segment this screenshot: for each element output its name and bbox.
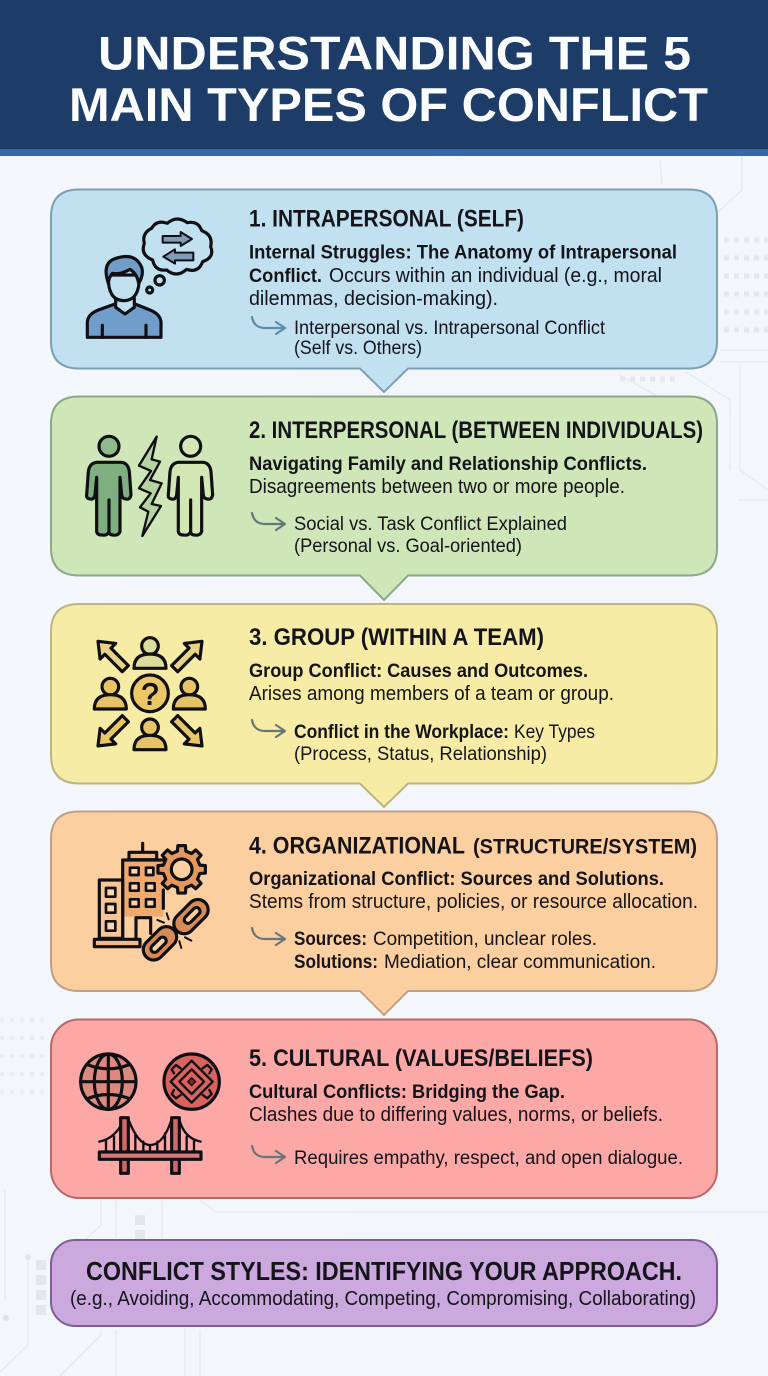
related topic: Key Types xyxy=(514,722,595,743)
arrow xyxy=(252,317,285,334)
description: Navigating Family and Relationship Conflicts. xyxy=(249,453,647,475)
related topic: Social vs. Task Conflict Explained xyxy=(294,514,567,535)
related topic xyxy=(294,514,567,557)
description: Conflict. xyxy=(249,265,322,287)
related topic xyxy=(294,722,595,765)
related topic xyxy=(294,318,606,359)
icon: building, gear and broken chain xyxy=(94,843,212,964)
heading: 2. INTERPERSONAL (BETWEEN INDIVIDUALS) xyxy=(249,417,703,444)
related topic xyxy=(294,929,656,973)
description xyxy=(249,453,647,498)
styles list: (e.g., Avoiding, Accommodating, Competing, Compromising, Collaborating) xyxy=(70,1288,696,1310)
description: Stems from structure, policies, or resource allocation. xyxy=(249,891,698,913)
heading: 4. ORGANIZATIONAL xyxy=(249,832,465,860)
arrow xyxy=(252,1146,285,1163)
related topic: Competition, unclear roles. xyxy=(373,929,597,950)
related topic: Mediation, clear communication. xyxy=(384,952,656,973)
description xyxy=(249,1081,663,1126)
panel: 2 interpersonal xyxy=(51,396,717,600)
heading xyxy=(249,832,697,860)
description: Occurs within an individual (e.g., moral xyxy=(329,265,662,287)
heading: 1. INTRAPERSONAL (SELF) xyxy=(249,206,524,232)
description: Clashes due to differing values, norms, or beliefs. xyxy=(249,1104,663,1126)
icon: group with question mark: ? xyxy=(141,677,159,711)
description xyxy=(249,242,677,310)
title: UNDERSTANDING THE 5 xyxy=(98,26,691,80)
icon: person thinking xyxy=(87,219,212,337)
related topic: Conflict in the Workplace: xyxy=(294,722,509,743)
related topic: (Self vs. Others) xyxy=(294,338,422,359)
arrow xyxy=(252,513,285,530)
panel: 5 cultural xyxy=(51,1020,717,1198)
icon: globe, cultural emblem and bridge xyxy=(81,1054,219,1173)
panel: 1 intrapersonal xyxy=(51,190,717,392)
icon: two people with lightning xyxy=(87,436,213,536)
description xyxy=(249,868,698,913)
title xyxy=(69,26,708,131)
related topic: Requires empathy, respect, and open dialogue. xyxy=(294,1148,683,1169)
description: Internal Struggles: The Anatomy of Intrapersonal xyxy=(249,242,677,264)
description: Organizational Conflict: Sources and Solutions. xyxy=(249,868,664,890)
related topic: Sources: xyxy=(294,929,367,950)
panel: conflict styles xyxy=(51,1240,717,1326)
description: dilemmas, decision-making). xyxy=(249,288,498,310)
panel: 4 organizational xyxy=(51,812,717,1015)
description xyxy=(249,660,614,705)
related topic: Solutions: xyxy=(294,952,378,973)
description: Disagreements between two or more people. xyxy=(249,476,625,498)
related topic: (Personal vs. Goal-oriented) xyxy=(294,536,522,557)
header banner xyxy=(0,0,768,156)
description: Cultural Conflicts: Bridging the Gap. xyxy=(249,1081,565,1103)
title: MAIN TYPES OF CONFLICT xyxy=(69,78,708,131)
arrow xyxy=(252,720,285,737)
heading: 3. GROUP (WITHIN A TEAM) xyxy=(249,624,544,651)
heading: 5. CULTURAL (VALUES/BELIEFS) xyxy=(249,1045,593,1072)
heading: (STRUCTURE/SYSTEM) xyxy=(473,836,697,858)
panel: 3 group xyxy=(51,604,717,807)
description: Group Conflict: Causes and Outcomes. xyxy=(249,660,588,682)
heading: CONFLICT STYLES: IDENTIFYING YOUR APPROACH. xyxy=(86,1256,682,1286)
related topic: (Process, Status, Relationship) xyxy=(294,744,547,765)
description: Arises among members of a team or group. xyxy=(249,683,614,705)
related topic: Interpersonal vs. Intrapersonal Conflict xyxy=(294,318,606,339)
icon: group with question mark xyxy=(90,634,210,754)
arrow xyxy=(252,928,285,945)
